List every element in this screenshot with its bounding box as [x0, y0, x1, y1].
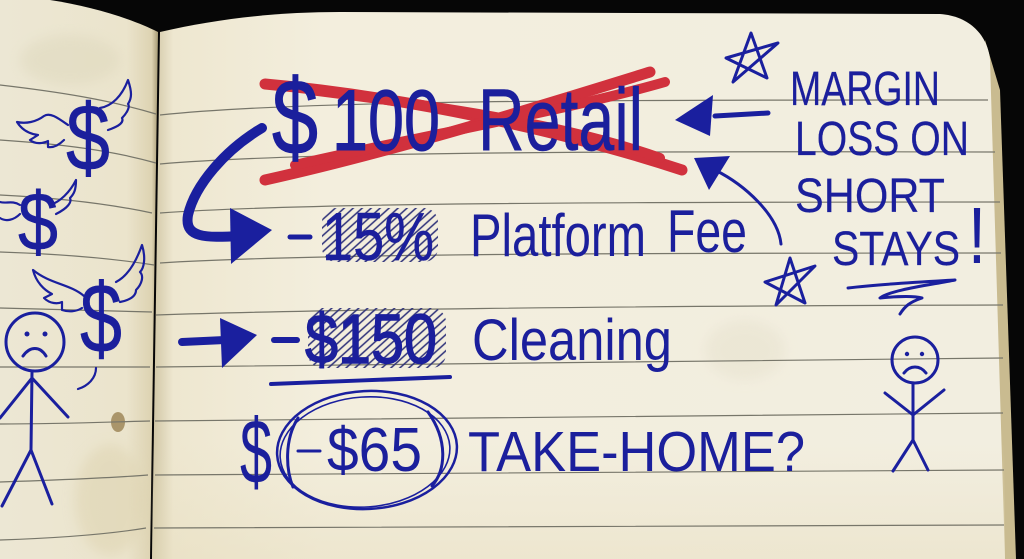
icon: star bottom: [765, 258, 815, 305]
text: result $ with circled minus $65: [240, 386, 460, 514]
heading: $100 Retail: [272, 57, 643, 177]
text: minus 15% platform fee: [290, 198, 747, 275]
arrow: to cleaning: [182, 318, 257, 368]
callout: margin loss on short stays: MARGIN: [790, 63, 940, 116]
arrow: curved down to platform fee: [188, 128, 272, 264]
text: minus $150 cleaning: $150: [305, 300, 437, 378]
icon: star top: [726, 33, 778, 82]
icon: winged dollar 2: $: [18, 175, 58, 268]
arrow: curved to strike: [694, 156, 781, 244]
icon: winged dollar 1: [17, 80, 131, 191]
text: minus $150 cleaning: Cleaning: [472, 308, 672, 373]
text: minus 15% platform fee: Fee: [667, 198, 747, 265]
callout: margin loss on short stays: STAYS: [832, 223, 960, 276]
panel: left notebook page: [0, 0, 158, 559]
callout: margin loss on short stays: [790, 63, 986, 280]
heading: $100 Retail: $: [272, 57, 318, 177]
text: minus $150 cleaning: [274, 300, 672, 378]
callout: margin loss on short stays: !: [968, 191, 986, 280]
squiggle under callout: [848, 280, 955, 314]
icon: winged dollar 3: [33, 245, 144, 389]
heading: $100 Retail: Retail: [478, 70, 643, 169]
red strikethrough marker: [265, 72, 682, 180]
arrow: callout to retail: [675, 95, 768, 136]
icon: winged dollar 3: $: [80, 263, 122, 373]
icon: winged dollar 2: [0, 175, 76, 268]
icon: sad stick figure left: [0, 313, 68, 506]
text: minus 15% platform fee: Platform: [470, 202, 646, 269]
heading: $100 Retail: 100: [332, 73, 440, 169]
icon: winged dollar 1: $: [66, 85, 110, 191]
text: take-home question: TAKE-HOME?: [468, 420, 805, 484]
callout: margin loss on short stays: LOSS ON: [795, 113, 969, 166]
sum underline: [271, 377, 450, 384]
text: minus 15% platform fee: 15%: [322, 199, 434, 275]
callout: margin loss on short stays: SHORT: [795, 170, 945, 223]
text: result $ with circled minus $65: $65: [327, 416, 422, 485]
panel: page edge stack: [985, 40, 1016, 559]
icon: sad stick figure right: [885, 337, 944, 471]
text: result $ with circled minus $65: $: [240, 401, 272, 503]
